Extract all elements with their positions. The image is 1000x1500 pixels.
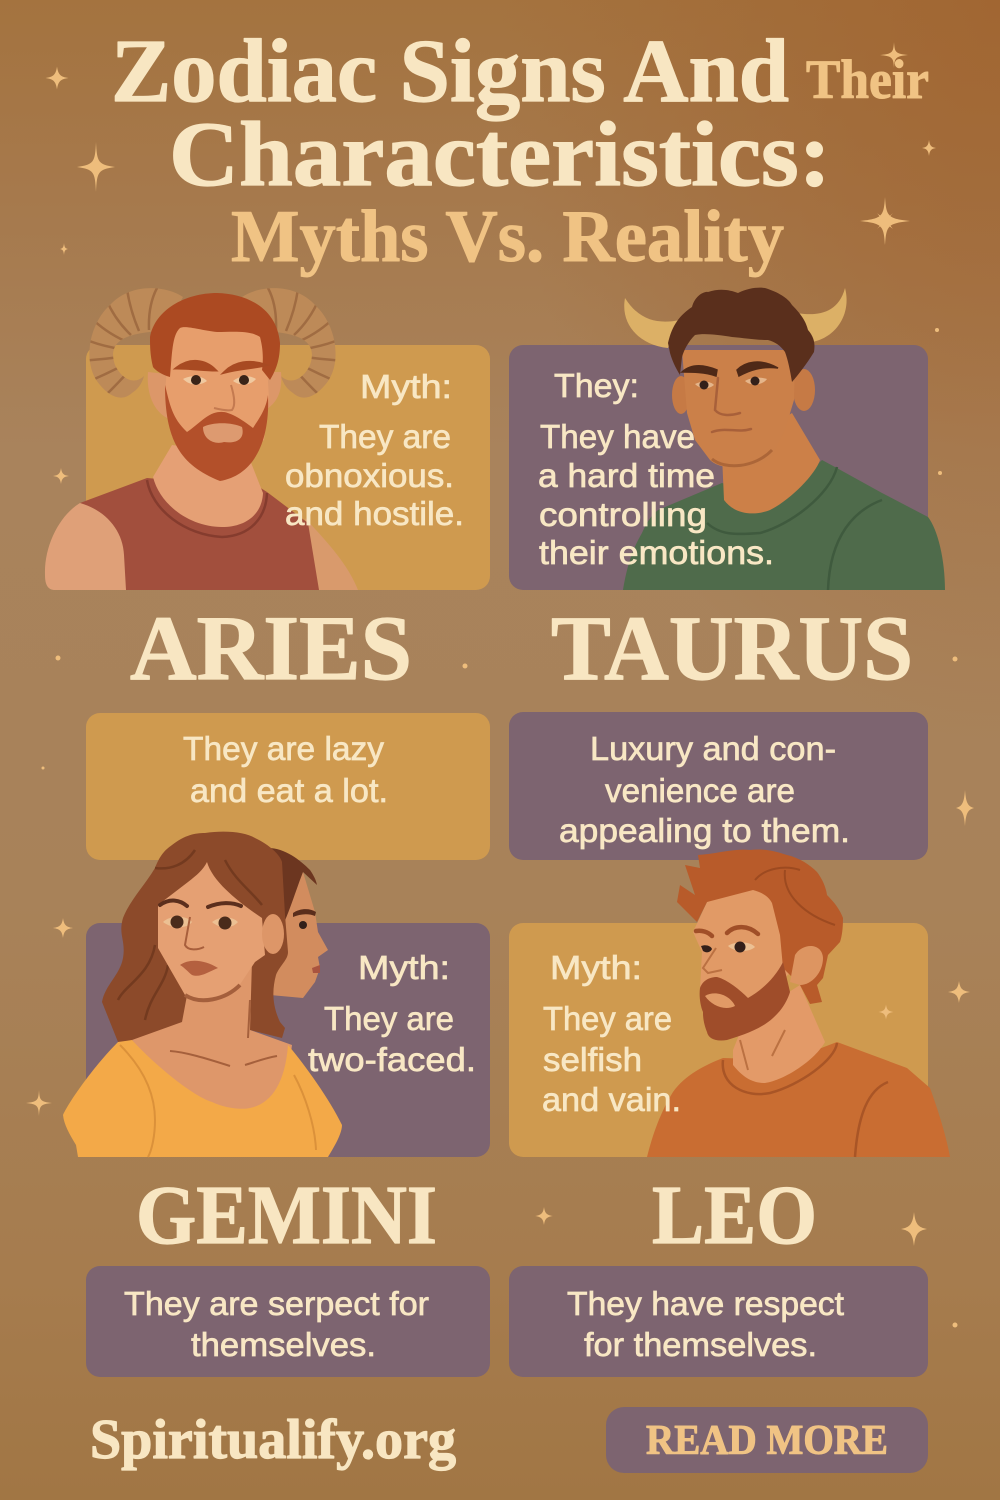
neck and chest bbox=[132, 960, 292, 1118]
eyes and brows bbox=[177, 361, 265, 372]
panel: taurus reality: venience are bbox=[605, 772, 795, 809]
eyes and brows bbox=[682, 362, 778, 376]
text: taurus fact: They have bbox=[540, 418, 695, 455]
neck bbox=[733, 985, 825, 1083]
top bbox=[63, 1040, 342, 1157]
panel: gemini reality bbox=[86, 1266, 490, 1377]
beard bbox=[700, 962, 790, 1041]
hair bbox=[668, 288, 814, 382]
horns bbox=[624, 298, 680, 348]
title: Their bbox=[806, 49, 929, 110]
text: leo myth bbox=[542, 949, 681, 1118]
text: gemini myth: Myth: bbox=[358, 949, 450, 986]
hair bbox=[150, 293, 280, 380]
face bbox=[693, 890, 795, 1012]
panel: aries reality: and eat a lot. bbox=[190, 772, 388, 809]
heading: leo: LEO bbox=[652, 1169, 817, 1262]
ears bbox=[672, 376, 690, 414]
sweater bbox=[623, 460, 945, 590]
icon: star in leo panel bbox=[878, 1004, 894, 1020]
panel: gemini reality: They are serpect for bbox=[124, 1285, 429, 1322]
face bbox=[682, 350, 795, 468]
heading: aries: ARIES bbox=[130, 597, 412, 699]
text: taurus fact bbox=[538, 367, 774, 571]
ears bbox=[148, 372, 176, 420]
text: leo myth: Myth: bbox=[550, 949, 642, 986]
ear bbox=[790, 946, 823, 985]
illustration: aries man bbox=[45, 288, 358, 590]
text: gemini myth: two-faced. bbox=[308, 1041, 476, 1078]
hair bbox=[677, 849, 843, 1004]
text: taurus fact: a hard time bbox=[538, 457, 715, 494]
panel: leo reality: They have respect bbox=[567, 1285, 844, 1322]
title: Zodiac Signs And bbox=[111, 22, 789, 121]
text: leo myth: and vain. bbox=[542, 1081, 681, 1118]
face bbox=[165, 325, 269, 468]
face bbox=[158, 862, 265, 1000]
illustration: gemini woman bbox=[63, 832, 342, 1157]
text: leo myth: selfish bbox=[543, 1041, 642, 1078]
illustration: leo man bbox=[647, 849, 950, 1157]
panel: taurus reality: appealing to them. bbox=[559, 812, 850, 849]
panel: gemini myth bbox=[86, 923, 490, 1157]
beard bbox=[165, 385, 268, 481]
panel: taurus fact bbox=[509, 345, 928, 590]
text: aries myth: Myth: bbox=[360, 368, 452, 405]
button: read more bbox=[606, 1407, 928, 1473]
panel: taurus reality: Luxury and con- bbox=[590, 730, 836, 767]
panel: aries reality: They are lazy bbox=[183, 730, 384, 767]
text: taurus fact: their emotions. bbox=[539, 534, 774, 571]
panel: aries myth bbox=[86, 345, 490, 590]
panel: leo myth bbox=[509, 923, 928, 1157]
features bbox=[696, 927, 758, 936]
neck bbox=[722, 413, 820, 513]
horns bbox=[77, 288, 183, 403]
features bbox=[160, 901, 241, 907]
heading: taurus: TAURUS bbox=[551, 597, 913, 699]
profile face bbox=[262, 870, 328, 998]
text: gemini myth: They are bbox=[324, 1000, 454, 1037]
text: taurus fact: controlling bbox=[539, 496, 707, 533]
text: aries myth: and hostile. bbox=[285, 495, 464, 532]
button: read more: READ MORE bbox=[646, 1418, 888, 1464]
panel: taurus reality bbox=[509, 712, 928, 860]
panel: leo reality: for themselves. bbox=[584, 1326, 817, 1363]
text: leo myth: They are bbox=[543, 1000, 672, 1037]
panel: gemini reality: themselves. bbox=[191, 1326, 376, 1363]
back hair bbox=[102, 832, 288, 1042]
title: Characteristics: bbox=[169, 103, 831, 205]
illustration: taurus man bbox=[623, 288, 945, 590]
title bbox=[111, 22, 929, 278]
title: Myths Vs. Reality bbox=[231, 196, 784, 278]
text: aries myth bbox=[285, 368, 464, 532]
brand: spiritualify.org: Spiritualify.org bbox=[90, 1409, 456, 1471]
text: taurus fact: They: bbox=[554, 367, 639, 404]
panel: leo reality bbox=[509, 1266, 928, 1377]
text: aries myth: obnoxious. bbox=[285, 457, 454, 494]
text: gemini myth bbox=[308, 949, 476, 1078]
panel: aries reality bbox=[86, 713, 490, 860]
sweater bbox=[647, 1042, 950, 1157]
text: aries myth: They are bbox=[319, 418, 451, 455]
heading: gemini: GEMINI bbox=[136, 1169, 437, 1262]
